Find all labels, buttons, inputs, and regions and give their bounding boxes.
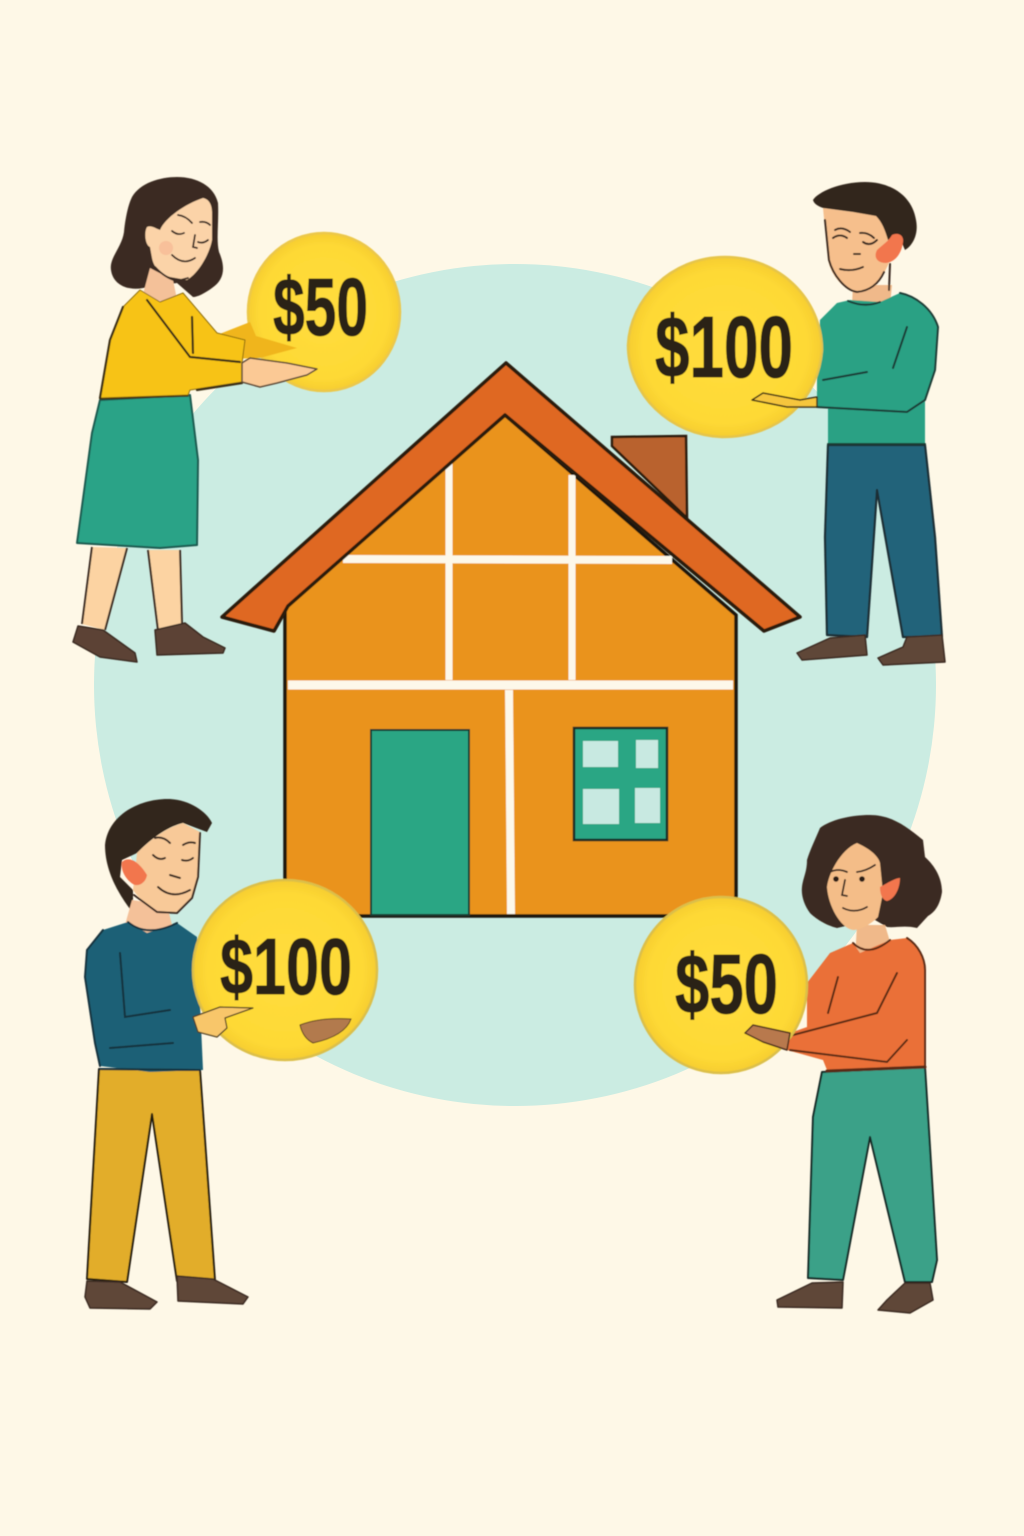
door (371, 730, 469, 915)
coin (248, 233, 400, 391)
coin (193, 880, 377, 1060)
neck (125, 900, 172, 937)
legs (82, 547, 127, 630)
roof (222, 363, 800, 631)
sweater lines (100, 300, 242, 399)
hair (105, 799, 212, 913)
shoes (85, 1281, 157, 1309)
neck (142, 268, 178, 304)
sweater lines (817, 293, 938, 444)
person: woman bottom right with $50 coin (635, 815, 942, 1313)
eyes (833, 876, 865, 882)
sweater (85, 922, 203, 1072)
face details (825, 220, 890, 292)
coin: $100 (220, 922, 352, 1011)
person: man bottom left with $100 coin (85, 799, 377, 1309)
neck (852, 285, 892, 305)
cheek (876, 234, 903, 263)
trousers (825, 445, 942, 637)
shoes (797, 635, 867, 660)
house (222, 363, 800, 916)
hair (111, 177, 223, 297)
face (823, 208, 893, 292)
hand (193, 1007, 253, 1037)
sweater (817, 293, 938, 443)
shoes (73, 626, 137, 662)
face details (155, 215, 210, 281)
hand (242, 358, 317, 387)
coin: $50 (273, 262, 368, 353)
skirt (77, 395, 198, 548)
coin: $50 (675, 937, 778, 1031)
shoes (777, 1282, 843, 1308)
hand (752, 393, 817, 407)
sweater lines (790, 938, 925, 1071)
background circle (94, 264, 936, 1106)
coin: $100 (655, 299, 793, 396)
hair (813, 182, 917, 250)
sleeve fold (197, 322, 297, 360)
person: woman top left with $50 coin (73, 177, 400, 662)
sweater (787, 938, 925, 1070)
cheek (159, 241, 173, 255)
face details (830, 865, 875, 911)
chimney (612, 436, 687, 518)
house walls (285, 415, 736, 916)
sweater (100, 290, 245, 398)
trousers (87, 1069, 215, 1282)
neck (855, 925, 891, 958)
cheek (122, 859, 147, 885)
coin (628, 257, 822, 437)
sweater lines (85, 922, 200, 1070)
wall timber lines (288, 462, 733, 914)
face (133, 823, 200, 913)
face details (134, 833, 200, 913)
hand (745, 1025, 790, 1050)
cheek (880, 878, 900, 901)
illustration (73, 177, 945, 1313)
face (827, 843, 883, 930)
curly hair (802, 815, 942, 928)
trousers (808, 1067, 937, 1282)
person: man top right with $100 coin (628, 182, 945, 665)
face (145, 198, 212, 280)
brown thumb (300, 1019, 351, 1043)
window (574, 728, 667, 840)
coin (635, 897, 807, 1073)
